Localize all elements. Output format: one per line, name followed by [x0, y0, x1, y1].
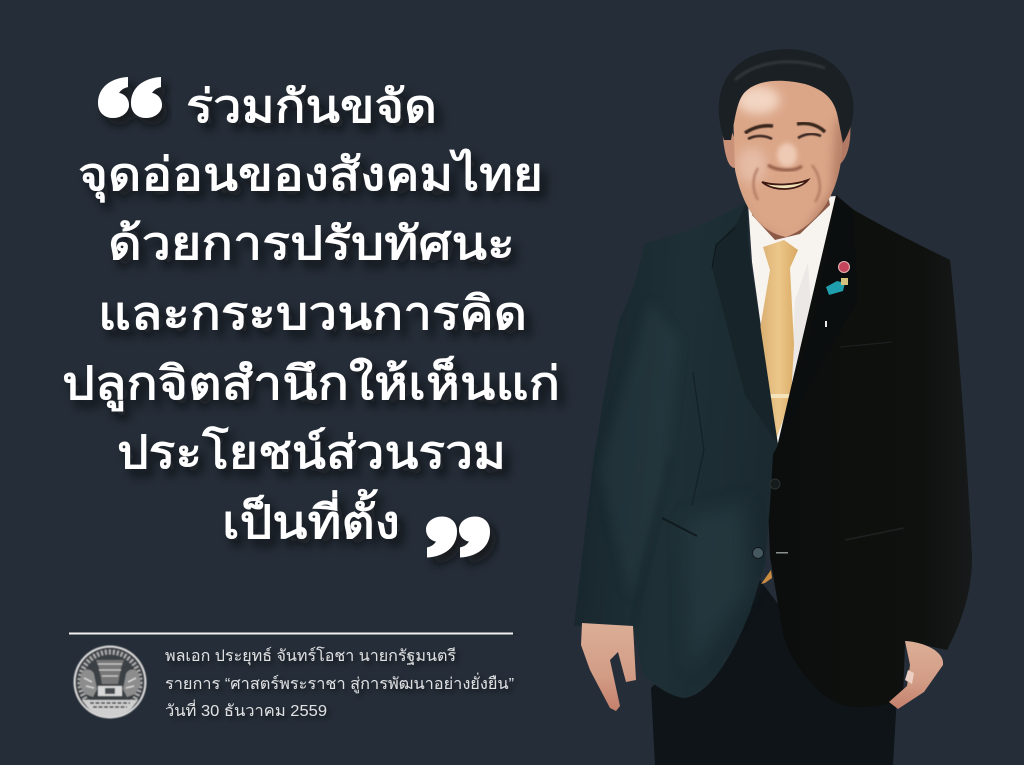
quote line 7: เป็นที่ตั้ง	[222, 489, 400, 548]
right ear	[838, 121, 850, 165]
caption line 2: programme: รายการ “ศาสตร์พระราชา สู่การพัฒนาอย่างยั่งยืน”	[165, 672, 514, 694]
icon: closing quotation mark	[426, 516, 490, 558]
head	[719, 49, 854, 245]
right hand	[889, 641, 943, 709]
jacket dart and pocket	[692, 372, 704, 505]
icon: government seal	[74, 646, 146, 718]
face	[733, 72, 842, 237]
jacket right side	[767, 195, 972, 707]
caption line 3: date: วันที่ 30 ธันวาคม 2559	[165, 699, 327, 720]
shirt	[748, 196, 836, 450]
face shading	[735, 82, 842, 233]
jacket left side	[574, 201, 778, 698]
quote line 3: ด้วยการปรับทัศนะ	[108, 217, 515, 269]
quote line 4: และกระบวนการคิด	[98, 287, 527, 339]
left ear	[722, 126, 736, 168]
quote line 5: ปลูกจิตสำนึกให้เห็นแก่	[62, 356, 560, 411]
left lapel	[712, 201, 778, 445]
neck shadow	[752, 195, 830, 240]
quote line 2: จุดอ่อนของสังคมไทย	[78, 148, 543, 203]
jacket sheen	[600, 300, 680, 600]
lapel pin: red badge	[838, 262, 850, 272]
eyebrows	[745, 123, 825, 133]
photo: man in dark suit	[574, 49, 972, 765]
left hand	[581, 623, 636, 711]
quote line 1: ร่วมกันขจัด	[186, 80, 437, 132]
lapel pin: turquoise ribbon	[826, 278, 848, 295]
tie	[759, 240, 798, 584]
trousers	[651, 580, 897, 765]
icon: opening quotation mark	[98, 77, 162, 118]
nose	[768, 165, 802, 170]
hair	[719, 49, 854, 143]
quote text	[62, 80, 560, 548]
smile lines	[754, 165, 820, 202]
quote line 6: ประโยชน์ส่วนรวม	[117, 426, 506, 478]
caption text	[165, 646, 514, 720]
caption line 1: name: พลเอก ประยุทธ์ จันทร์โอชา นายกรัฐมนตรี	[165, 646, 456, 666]
eyes	[748, 134, 821, 139]
right lapel	[778, 197, 858, 445]
jacket buttons	[770, 479, 780, 489]
divider line	[69, 632, 513, 634]
arm shadow fold	[634, 458, 670, 626]
smile	[762, 180, 808, 189]
